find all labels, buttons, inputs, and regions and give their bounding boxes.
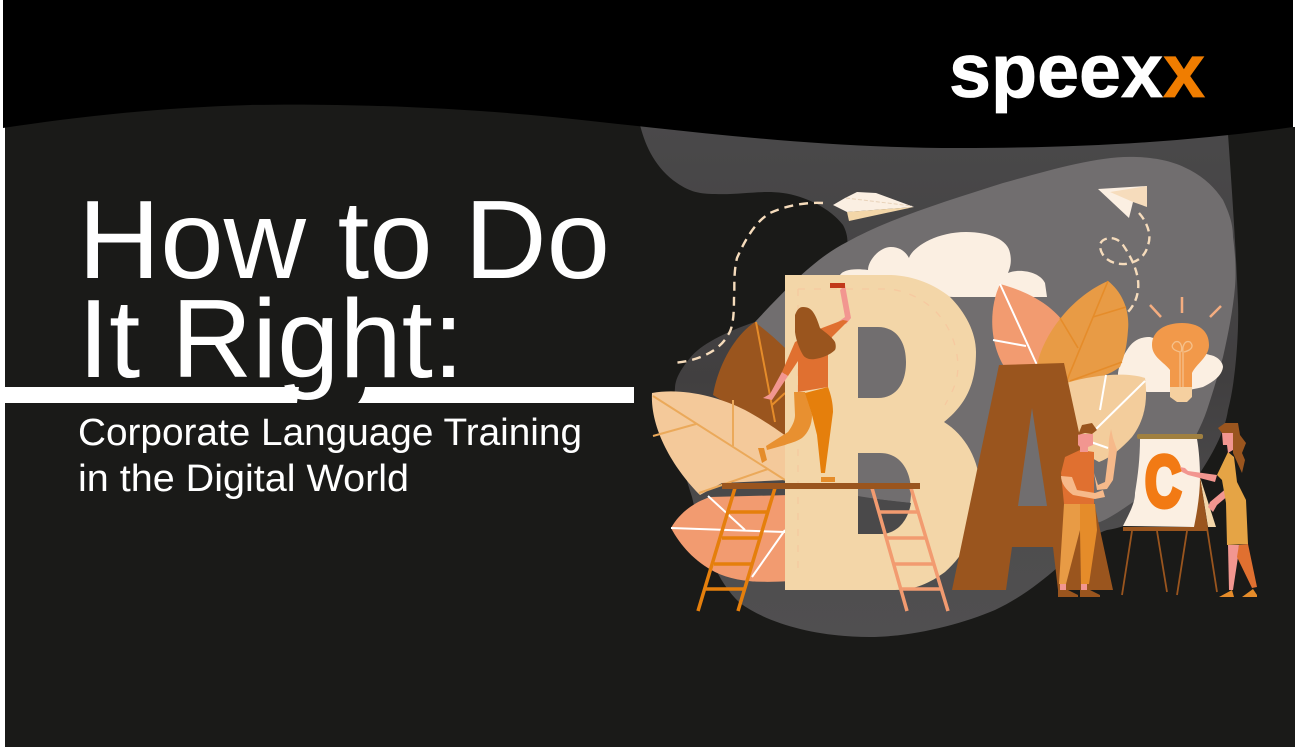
title underline bar: [5, 387, 634, 403]
title: [78, 178, 610, 401]
leaf: pale left: [652, 391, 786, 495]
arm: [1180, 467, 1217, 482]
lower arm: [1208, 483, 1235, 512]
cloud behind letters: [840, 232, 1047, 297]
leaf: pale right: [1060, 375, 1146, 462]
man pointing: [1058, 423, 1117, 597]
shirt: [1061, 450, 1094, 504]
pants: [1059, 504, 1080, 584]
background blob: light grey: [755, 157, 1236, 523]
paper sheet: [1123, 439, 1200, 527]
back flap: [1200, 477, 1216, 527]
paper plane left: [833, 192, 914, 221]
hair: [1218, 423, 1246, 473]
subtitle: Corporate Language Training: [78, 412, 582, 454]
shoes: [1058, 590, 1100, 597]
dashed flight path right: [1100, 213, 1149, 313]
scaffold: left ladder: [698, 488, 775, 611]
hair: [1078, 423, 1097, 435]
B hole shadow: [858, 497, 911, 534]
shoes: [1219, 589, 1257, 597]
leaf: salmon top: [992, 284, 1062, 370]
shoes: [758, 448, 835, 482]
dashed flight path left: [673, 203, 823, 363]
head: [1078, 434, 1093, 452]
top black band: [3, 0, 1293, 148]
light bulb: [1150, 297, 1221, 402]
title: How to Do: [78, 178, 610, 302]
face: [1222, 433, 1233, 453]
subtitle: [78, 412, 582, 500]
hair: [795, 307, 836, 359]
left arm: [763, 372, 788, 400]
subtitle: in the Digital World: [78, 458, 409, 500]
cloud behind bulb: [1118, 337, 1223, 392]
scaffold plank: [722, 483, 920, 489]
dress: [1217, 452, 1248, 545]
leaf: salmon bottom-left: [671, 495, 790, 582]
leaf: orange: [1037, 281, 1128, 385]
woman painting the letter B: [758, 283, 851, 482]
raised arm: [1094, 429, 1117, 490]
right leg: [805, 387, 833, 473]
legs: [1228, 545, 1239, 590]
paper plane right: [1098, 186, 1147, 218]
flipchart: [1122, 434, 1217, 595]
leaf: brown: [713, 322, 785, 440]
title: It Right:: [78, 277, 464, 401]
paint roller: [830, 283, 845, 288]
logo: speexx: speexx: [949, 29, 1205, 114]
shirt: [782, 320, 848, 392]
letter A: [952, 363, 1113, 590]
woman presenting: [1180, 423, 1257, 597]
tray: [1123, 527, 1207, 531]
background blob: dark grey: [640, 120, 1238, 637]
ankles: [1060, 584, 1087, 590]
top bar: [1137, 434, 1203, 439]
letter C: C: [1145, 443, 1181, 523]
left leg: [766, 392, 812, 450]
flipchart legs: [1122, 528, 1217, 595]
illustration: letters, leaves and people: [652, 186, 1257, 611]
crossed arm: [1061, 476, 1105, 499]
letter B: [785, 275, 980, 590]
raised arm: [838, 285, 851, 324]
scaffold: right ladder: [872, 488, 948, 611]
